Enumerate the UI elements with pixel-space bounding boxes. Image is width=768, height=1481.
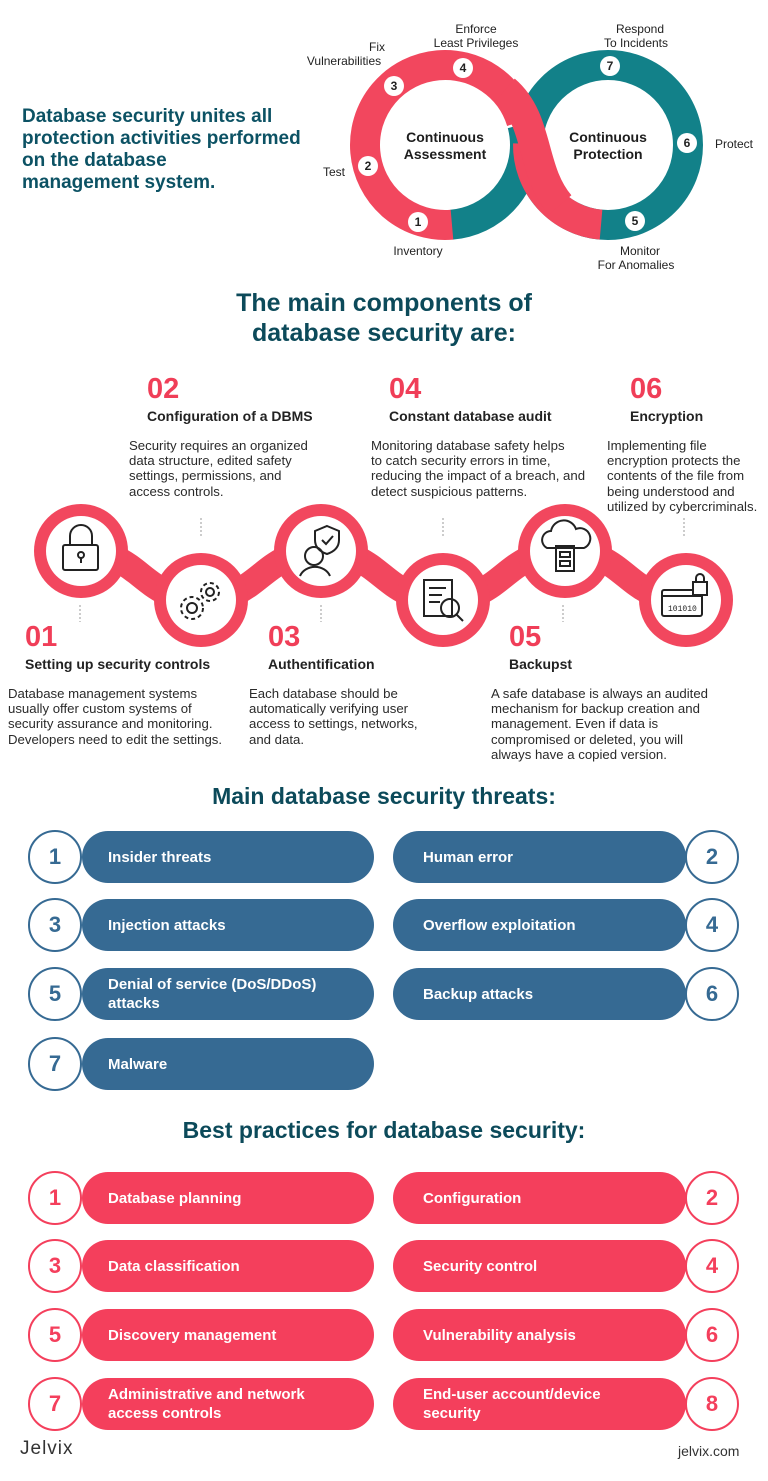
heading: best practices: Best practices for database security: — [183, 1117, 585, 1143]
threats list: 5 — [49, 981, 61, 1006]
best practices list: Configuration — [423, 1190, 521, 1206]
component 03: automatically verifying user — [249, 701, 408, 716]
best practices list: 1 — [49, 1185, 61, 1210]
step badges: 3 — [391, 79, 398, 93]
best practices list: Security control — [423, 1258, 537, 1274]
step labels: Respond — [616, 22, 664, 36]
step badges: 1 — [415, 215, 422, 229]
heading: main components — [236, 289, 532, 347]
threats list: attacks — [108, 995, 160, 1012]
component 05: always have a copied version. — [491, 747, 667, 762]
best practices list: 8 — [706, 1391, 718, 1416]
footer url: jelvix.com — [678, 1443, 739, 1459]
component 06: encryption protects the — [607, 453, 740, 468]
icon: lock — [63, 525, 98, 570]
threats list: Denial of service (DoS/DDoS) — [108, 976, 316, 993]
loop: continuous assessment ring — [358, 58, 695, 232]
component 01: Setting up security controls — [25, 656, 210, 672]
component 01: 01 — [25, 621, 57, 653]
best practices list: 7 — [49, 1391, 61, 1416]
chain band — [81, 551, 686, 600]
step badges: 7 — [607, 59, 614, 73]
step badges: 4 — [460, 61, 467, 75]
component 06 — [607, 373, 757, 514]
step labels: Vulnerabilities — [307, 54, 381, 68]
threats list: Malware — [108, 1056, 167, 1072]
component 02: access controls. — [129, 484, 224, 499]
component 04: 04 — [389, 373, 421, 405]
ring labels — [404, 129, 647, 162]
step labels: Least Privileges — [434, 36, 518, 50]
icon: encryption: 101010 — [668, 605, 697, 614]
step badges — [358, 56, 697, 232]
component 04: Constant database audit — [389, 408, 552, 424]
threats list: 1 — [49, 844, 61, 869]
step labels: Enforce — [455, 22, 497, 36]
component 02: 02 — [147, 373, 179, 405]
heading: threats: Main database security threats: — [212, 783, 556, 809]
component 05 — [491, 621, 708, 762]
component 01: security assurance and monitoring. — [8, 716, 213, 731]
step labels: Test — [323, 165, 346, 179]
best practices list: Database planning — [108, 1190, 241, 1206]
threats list: 6 — [706, 981, 718, 1006]
best practices list: 5 — [49, 1322, 61, 1347]
component 04: Monitoring database safety helps — [371, 438, 565, 453]
component 04: reducing the impact of a breach, and — [371, 468, 585, 483]
intro text: on the database — [22, 150, 167, 171]
best practices list: 4 — [706, 1253, 718, 1278]
step labels: Monitor — [620, 244, 660, 258]
component 05: compromised or deleted, you will — [491, 732, 683, 747]
threats list: Injection attacks — [108, 916, 226, 934]
footer logo: Jelvix — [20, 1438, 74, 1459]
best practices list: 6 — [706, 1322, 718, 1347]
component 05: Backupst — [509, 656, 572, 672]
step badges: 2 — [365, 159, 372, 173]
component 04: detect suspicious patterns. — [371, 484, 527, 499]
component 03: access to settings, networks, — [249, 716, 418, 731]
step badges: 5 — [632, 214, 639, 228]
loop: continuous protection ring — [347, 47, 688, 243]
component 06: contents of the file from — [607, 468, 744, 483]
component 03: Each database should be — [249, 686, 398, 701]
best practices list: 2 — [706, 1185, 718, 1210]
icon: encryption — [662, 574, 707, 616]
threats list — [28, 830, 739, 1091]
best practices list: 3 — [49, 1253, 61, 1278]
step badges: 6 — [684, 136, 691, 150]
intro text: protection activities performed — [22, 128, 301, 149]
best practices list: Data classification — [108, 1258, 240, 1274]
best practices list: Administrative and network — [108, 1386, 305, 1403]
step labels: Protect — [715, 137, 754, 151]
component 02 — [129, 373, 313, 499]
intro text: management system. — [22, 172, 215, 193]
icon: cloud backup — [542, 520, 590, 571]
threats list: Overflow exploitation — [423, 916, 576, 934]
component 03 — [249, 621, 418, 747]
component 06: Encryption — [630, 408, 703, 424]
component 03: 03 — [268, 621, 300, 653]
component 01 — [8, 621, 222, 747]
component 06: utilized by cybercriminals. — [607, 499, 757, 514]
intro text — [22, 106, 301, 193]
threats list: Backup attacks — [423, 986, 533, 1002]
best practices list: End-user account/device — [423, 1386, 601, 1403]
step labels: To Incidents — [604, 36, 668, 50]
best practices list: Vulnerability analysis — [423, 1326, 576, 1344]
component 04 — [371, 373, 585, 499]
component 05: mechanism for backup creation and — [491, 701, 700, 716]
intro text: Database security unites all — [22, 106, 272, 127]
best practices list — [28, 1171, 739, 1431]
step labels: Fix — [369, 40, 385, 54]
icon: gears — [181, 583, 219, 619]
component 06: 06 — [630, 373, 662, 405]
component 06: being understood and — [607, 484, 735, 499]
component 02: data structure, edited safety — [129, 453, 292, 468]
step labels — [307, 22, 754, 272]
component 02: Configuration of a DBMS — [147, 408, 313, 424]
best practices list: access controls — [108, 1405, 221, 1422]
threats list: Human error — [423, 848, 513, 866]
ring labels: Continuous — [569, 129, 647, 145]
component 02: settings, permissions, and — [129, 468, 281, 483]
icon: audit document — [424, 580, 463, 621]
ring labels: Continuous — [406, 129, 484, 145]
threats list: 7 — [49, 1051, 61, 1076]
component 03: and data. — [249, 732, 304, 747]
component 05: 05 — [509, 621, 541, 653]
threats list: 2 — [706, 844, 718, 869]
threats list: 3 — [49, 912, 61, 937]
component 05: A safe database is always an audited — [491, 686, 708, 701]
step labels: Inventory — [393, 244, 443, 258]
threats list: 4 — [706, 912, 718, 937]
component 02: Security requires an organized — [129, 438, 308, 453]
best practices list: Discovery management — [108, 1326, 276, 1344]
best practices list: security — [423, 1405, 481, 1422]
threats list: Insider threats — [108, 848, 211, 866]
heading: main components: The main components of — [236, 289, 532, 317]
component 06: Implementing file — [607, 438, 707, 453]
component 01: Developers need to edit the settings. — [8, 732, 222, 747]
component 04: to catch security errors in time, — [371, 453, 551, 468]
component 05: management. Even if data is — [491, 716, 658, 731]
ring labels: Protection — [573, 146, 643, 162]
heading: main components: database security are: — [252, 319, 516, 347]
step labels: For Anomalies — [598, 258, 674, 272]
component 01: usually offer custom systems of — [8, 701, 192, 716]
chain of icon circles — [34, 504, 733, 647]
ring labels: Assessment — [404, 146, 487, 162]
component 01: Database management systems — [8, 686, 197, 701]
icon: user shield — [300, 526, 339, 576]
infinity loop diagram — [307, 22, 754, 272]
component 03: Authentification — [268, 656, 375, 672]
